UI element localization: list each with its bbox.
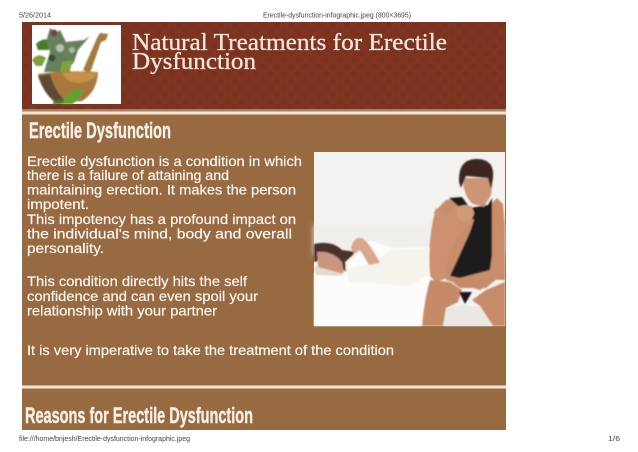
page header: file name: Erectile-dysfunction-infographic.jpeg (800×3695) bbox=[263, 10, 411, 20]
text block: description: It is very imperative to take the treatment of the condition bbox=[27, 342, 394, 358]
cream divider bbox=[22, 112, 506, 114]
panel: erectile dysfunction section bbox=[22, 114, 506, 430]
text block: description: maintaining erection. It makes the person bbox=[27, 182, 296, 198]
photo: couple in bed bbox=[314, 152, 505, 326]
panel: title banner bbox=[22, 22, 506, 112]
heading: banner title bbox=[132, 30, 447, 75]
text block: description: confidence and can even spoil your bbox=[27, 288, 258, 304]
text block: description: Erectile dysfunction is a condition in which bbox=[27, 153, 302, 169]
text block: description bbox=[27, 153, 394, 358]
heading: Reasons for Erectile Dysfunction: Reasons for Erectile Dysfunction bbox=[25, 403, 253, 428]
text block: description: there is a failure of attaining and bbox=[27, 167, 229, 183]
text block: description: relationship with your partner bbox=[27, 302, 217, 318]
text block: description: personality. bbox=[27, 240, 104, 256]
text block: description: This condition directly hits the self bbox=[27, 273, 247, 289]
heading: banner title: Dysfunction bbox=[132, 49, 256, 75]
text block: description: impotent. bbox=[27, 196, 89, 212]
text block: description: the individual's mind, body and overall bbox=[27, 226, 292, 242]
divider bbox=[22, 386, 506, 388]
page footer: file path: file:///home/brijesh/Erectile-dysfunction-infographic.jpeg bbox=[19, 434, 190, 443]
icon: herbs in mortar and pestle bbox=[32, 25, 121, 104]
heading: banner title: Natural Treatments for Erectile bbox=[132, 30, 447, 56]
text block: description: This impotency has a profound impact on bbox=[27, 211, 296, 227]
page header: date: 5/26/2014 bbox=[19, 10, 51, 20]
page footer: page number: 1/6 bbox=[608, 434, 620, 443]
heading: Erectile Dysfunction: Erectile Dysfunction bbox=[29, 118, 171, 143]
